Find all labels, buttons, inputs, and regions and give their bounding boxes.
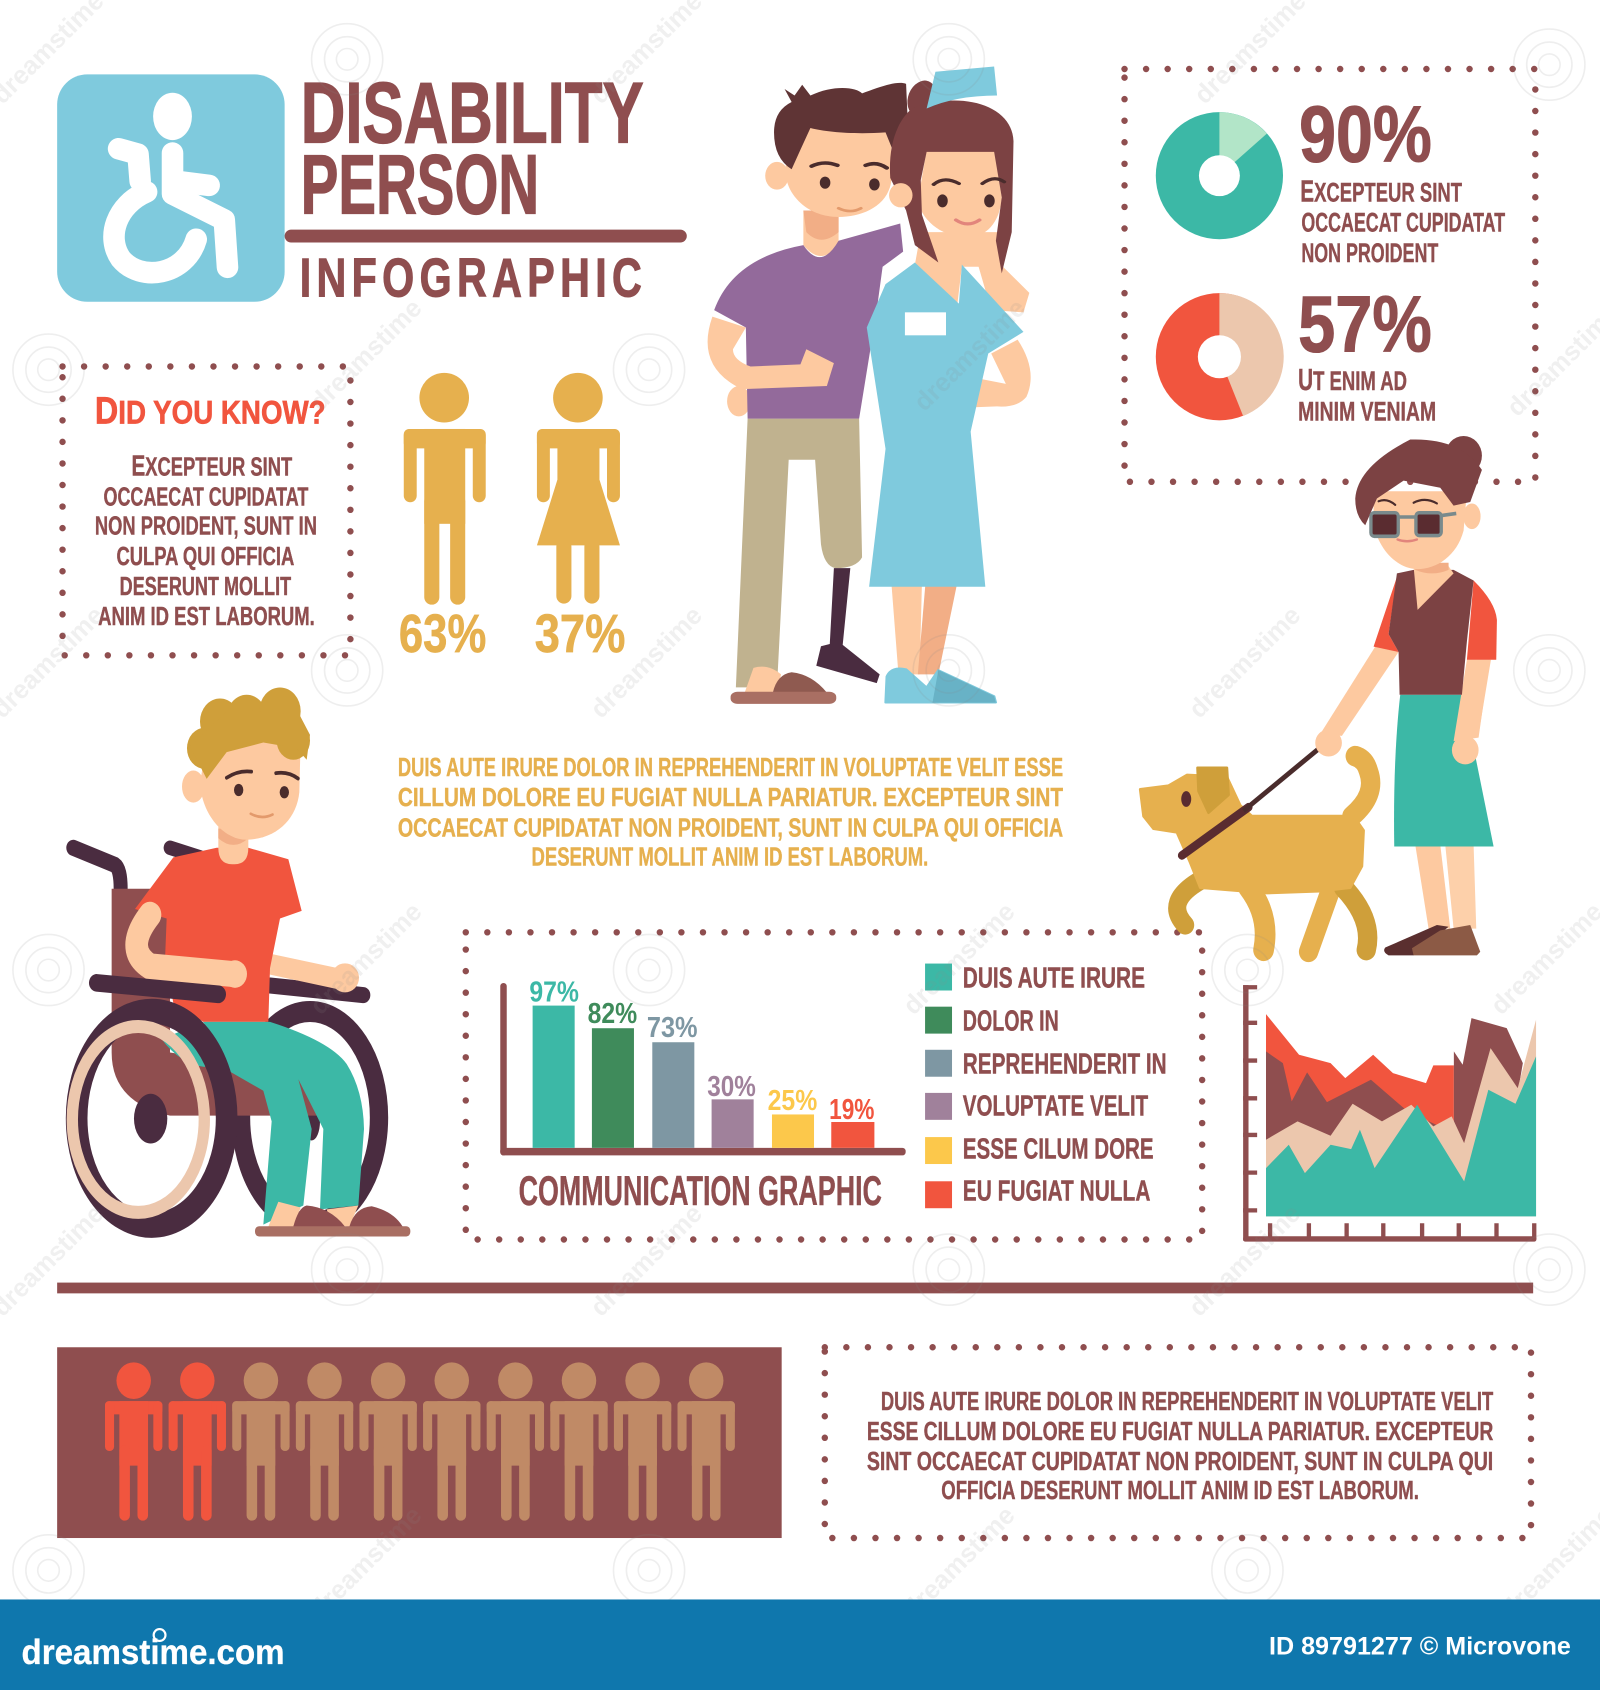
watermark pattern: dreamstime	[1184, 1200, 1306, 1322]
gender statistic: female 37%: 37%	[535, 604, 625, 664]
statistic: 57% text	[1298, 279, 1436, 426]
gender statistic: male 63%: 63%	[399, 604, 486, 664]
divider bar	[57, 1283, 1533, 1293]
chart title: COMMUNICATION GRAPHIC	[519, 1167, 882, 1214]
text block: did you know body: EXCEPTEUR SINT	[132, 450, 292, 482]
statistic: 90% text: 90%	[1299, 90, 1432, 179]
title: DISABILITY	[301, 65, 644, 161]
panel: donut statistics	[1125, 69, 1535, 482]
footer logo: dreamstime: dreamstime.com	[22, 1632, 285, 1672]
title: PERSON	[301, 137, 539, 231]
chart legend: REPREHENDERIT IN	[963, 1048, 1167, 1080]
panel: bar chart box	[466, 932, 1202, 1239]
statistic: 90% text: NON PROIDENT	[1301, 238, 1439, 268]
donut chart: 57%	[1156, 293, 1284, 420]
text block: did you know body: DESERUNT MOLLIT	[120, 573, 291, 601]
header logo icon: wheelchair symbol	[57, 74, 285, 302]
chart legend: EU FUGIAT NULLA	[963, 1176, 1150, 1208]
bar chart	[500, 976, 906, 1155]
text block: did you know body	[95, 450, 317, 631]
statistic: 90% text	[1299, 90, 1505, 268]
watermark pattern: dreamstime	[305, 294, 428, 417]
text block: bottom paragraph: OFFICIA DESERUNT MOLLIT ANIM ID EST LABORUM.	[941, 1477, 1419, 1505]
chart legend: DOLOR IN	[963, 1005, 1059, 1037]
text block: central yellow paragraph: DUIS AUTE IRURE DOLOR IN REPREHENDERIT IN VOLUPTATE VELIT ESSE	[398, 754, 1063, 782]
pictogram: 2 highlighted people	[105, 1362, 226, 1521]
bar chart: 97%	[529, 976, 579, 1008]
text block: central yellow paragraph: OCCAECAT CUPIDATAT NON PROIDENT, SUNT IN CULPA QUI OFFICIA	[398, 814, 1063, 842]
chart legend	[925, 962, 1167, 1208]
footer credit: ID 89791277 © Microvone	[1269, 1633, 1571, 1660]
illustration: man with prosthetic leg and nurse	[708, 66, 1031, 704]
watermark pattern: dreamstime	[1184, 601, 1306, 724]
panel: did you know	[63, 366, 350, 655]
bar chart: 19%	[829, 1094, 874, 1126]
title	[285, 65, 687, 309]
illustration: blind woman with guide dog	[1140, 436, 1497, 955]
bar chart: 73%	[647, 1012, 698, 1044]
watermark pattern: dreamstime	[305, 898, 428, 1020]
pictogram: 8 other people	[232, 1362, 735, 1521]
bar chart: 30%	[707, 1071, 756, 1103]
statistic: 57% text: UT ENIM AD	[1298, 364, 1407, 397]
statistic: 90% text: OCCAECAT CUPIDATAT	[1301, 208, 1505, 238]
watermark pattern: dreamstime	[898, 1501, 1021, 1624]
text block: central yellow paragraph: CILLUM DOLORE EU FUGIAT NULLA PARIATUR. EXCEPTEUR SINT	[398, 784, 1063, 812]
watermark pattern: dreamstime	[585, 1200, 708, 1322]
bar chart: 25%	[768, 1085, 817, 1117]
text block: central yellow paragraph	[398, 754, 1063, 871]
statistic: 57% text: 57%	[1298, 279, 1432, 368]
text block: did you know body: CULPA QUI OFFICIA	[116, 543, 294, 571]
donut chart: 90%	[1156, 112, 1283, 239]
footer bar	[0, 1599, 1600, 1690]
watermark pattern: dreamstime	[585, 601, 708, 724]
bar chart: 82%	[588, 998, 637, 1030]
text block: bottom paragraph	[867, 1388, 1494, 1505]
text block: did you know body: ANIM ID EST LABORUM.	[98, 603, 315, 631]
chart legend: DUIS AUTE IRURE	[963, 962, 1145, 994]
text block: did you know body: NON PROIDENT, SUNT IN	[95, 513, 317, 541]
statistic: 90% text: EXCEPTEUR SINT	[1300, 176, 1462, 209]
statistic: 57% text: MINIM VENIAM	[1298, 396, 1436, 426]
panel: pictogram row of ten people	[57, 1347, 782, 1538]
chart legend: VOLUPTATE VELIT	[963, 1091, 1148, 1123]
illustration: boy in wheelchair	[72, 687, 410, 1237]
watermark pattern: dreamstime	[909, 294, 1031, 417]
watermark pattern: dreamstime	[305, 1501, 428, 1624]
panel: bottom paragraph	[825, 1347, 1531, 1538]
heading: did you know: DID YOU KNOW?	[95, 390, 326, 432]
gender statistic: male 63%	[399, 373, 486, 664]
watermark pattern: dreamstime	[898, 898, 1021, 1020]
gender statistic: female 37%	[535, 373, 625, 664]
title: INFOGRAPHIC	[300, 248, 642, 309]
text block: did you know body: OCCAECAT CUPIDATAT	[104, 483, 308, 511]
area chart	[1243, 985, 1536, 1242]
text block: central yellow paragraph: DESERUNT MOLLIT ANIM ID EST LABORUM.	[532, 843, 928, 871]
chart legend: ESSE CILUM DORE	[963, 1134, 1154, 1166]
